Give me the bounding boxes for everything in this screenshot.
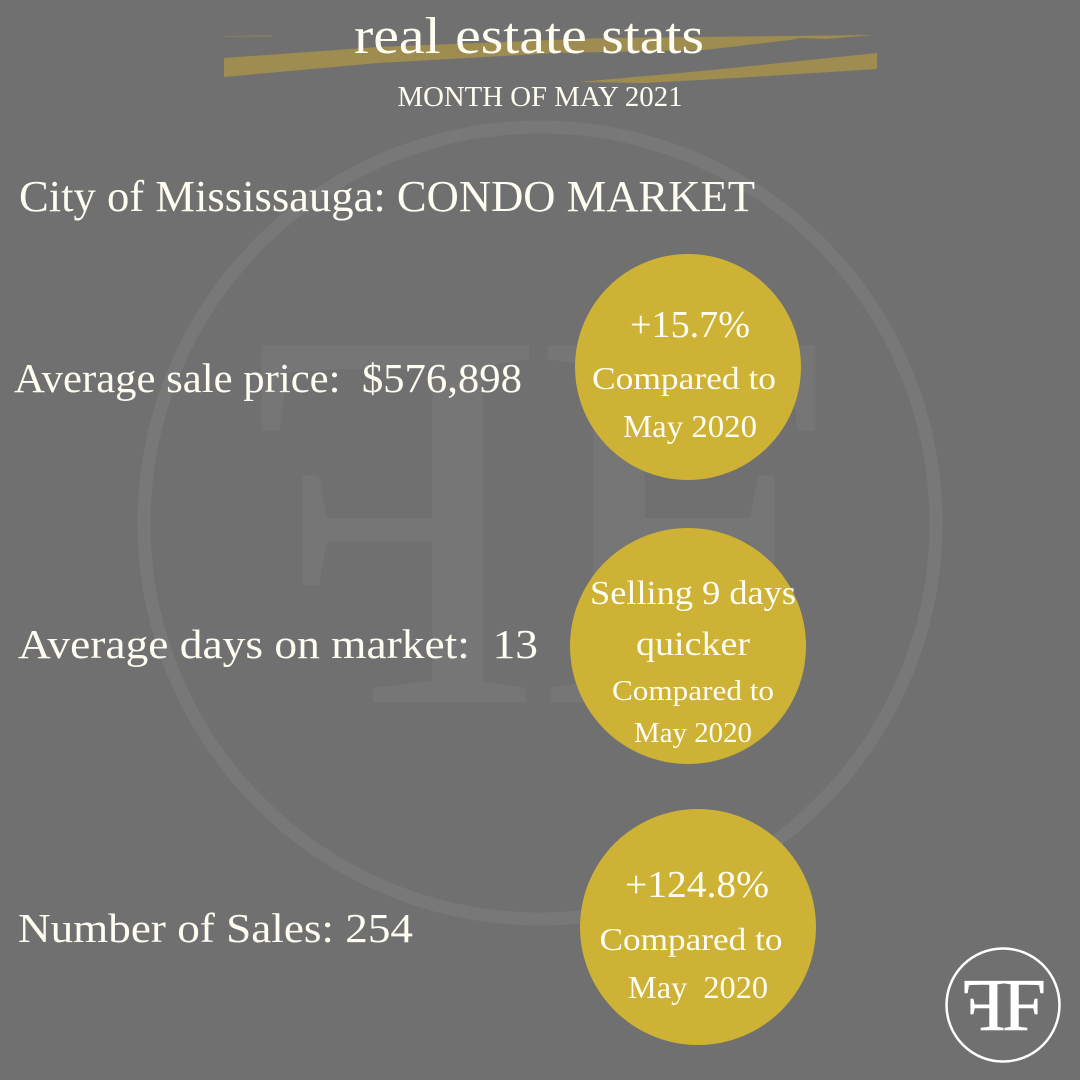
watermark logo: F [242, 216, 545, 820]
badge: sales change: May 2020 [628, 969, 768, 1005]
gold brush strokes [224, 35, 877, 83]
badge: price change: +15.7% [630, 304, 750, 346]
heading: market: City of Mississauga: CONDO MARKET [19, 172, 755, 221]
badge: price change: Compared to [592, 360, 776, 396]
title: real estate stats [354, 8, 704, 65]
badge: days change [570, 528, 806, 764]
badge: days change: Compared to [612, 675, 774, 707]
stat: average days on market: Average days on market: 13 [18, 621, 538, 667]
badge: price change [575, 254, 801, 480]
stat: number of sales: Number of Sales: 254 [18, 905, 413, 951]
watermark logo: F [532, 216, 835, 820]
logo: corner monogram [946, 948, 1060, 1062]
badge: sales change: Compared to [600, 921, 782, 957]
badge: price change: May 2020 [623, 408, 757, 444]
badge: sales change [580, 809, 816, 1045]
stat: average sale price: Average sale price: $576,898 [14, 355, 522, 401]
watermark logo [144, 127, 936, 919]
badge: days change: quicker [636, 626, 751, 663]
subtitle: MONTH OF MAY 2021 [398, 82, 682, 113]
badge: days change: May 2020 [634, 717, 752, 749]
badge: days change: Selling 9 days [590, 575, 796, 612]
logo: corner monogram: F [962, 964, 1006, 1046]
logo: corner monogram: F [1002, 964, 1046, 1046]
badge: sales change: +124.8% [625, 864, 769, 906]
